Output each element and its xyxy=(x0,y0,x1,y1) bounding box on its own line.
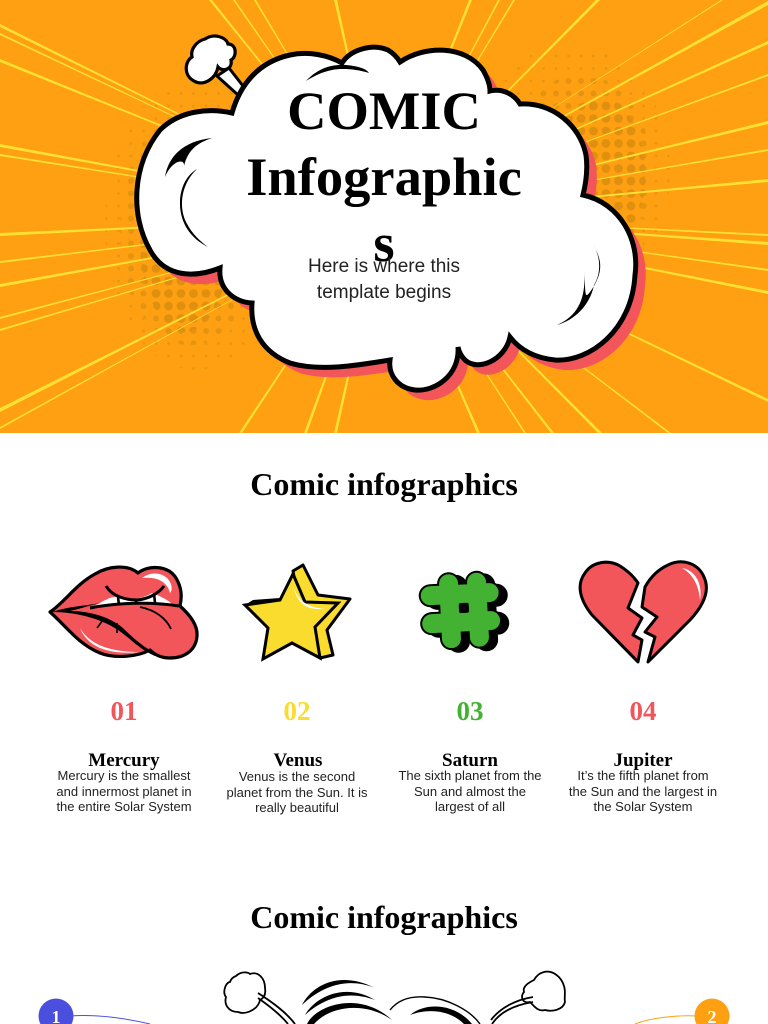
heading: section 1: Comic infographics xyxy=(250,466,518,502)
bottom explosion illustration xyxy=(223,970,566,1024)
badge 1 xyxy=(38,998,150,1024)
column 1 text: the entire Solar System xyxy=(56,799,192,814)
icon: lips xyxy=(48,566,199,660)
small smoke puff xyxy=(186,36,243,95)
heading: section 2: Comic infographics xyxy=(250,899,518,935)
column 3 text: largest of all xyxy=(435,799,505,814)
column 3 name: Saturn xyxy=(442,750,498,771)
icon: star xyxy=(242,563,352,662)
column 4 text: the Sun and the largest in xyxy=(569,784,717,799)
column 3 text: The sixth planet from the xyxy=(398,768,542,783)
number 04: 04 xyxy=(630,696,656,726)
title: COMIC xyxy=(287,80,481,141)
title: s xyxy=(373,212,395,273)
column 3 text xyxy=(398,768,542,814)
subtitle: Here is where this xyxy=(308,256,460,277)
title: Infographic xyxy=(246,146,522,207)
column 2 text: planet from the Sun. It is xyxy=(227,785,367,800)
column 1 text: Mercury is the smallest xyxy=(58,768,190,783)
badge 2 xyxy=(634,998,730,1024)
column 2 text xyxy=(227,769,367,815)
speed lines xyxy=(0,0,768,433)
number 02: 02 xyxy=(284,696,310,726)
subtitle xyxy=(308,256,460,303)
icon: hashtag xyxy=(418,570,510,653)
column 1 name: Mercury xyxy=(88,750,160,771)
column 1 text xyxy=(56,768,192,814)
number 03: 03 xyxy=(456,696,484,726)
column 4 name: Jupiter xyxy=(613,750,673,771)
subtitle: template begins xyxy=(317,282,451,303)
column 4 text: the Solar System xyxy=(594,799,692,814)
hero banner xyxy=(0,0,768,433)
column 1 text: and innermost planet in xyxy=(56,784,192,799)
title xyxy=(246,80,522,273)
column 4 text xyxy=(569,768,717,814)
column 2 text: Venus is the second xyxy=(239,769,355,784)
column 4 text: It’s the fifth planet from xyxy=(577,768,709,783)
cloud shadow xyxy=(147,57,646,400)
speech cloud xyxy=(137,47,636,390)
column 3 text: Sun and almost the xyxy=(414,784,526,799)
column 2 name: Venus xyxy=(274,750,322,771)
icon: broken heart xyxy=(578,560,708,664)
column 2 text: really beautiful xyxy=(255,800,339,815)
number 01: 01 xyxy=(110,696,138,726)
